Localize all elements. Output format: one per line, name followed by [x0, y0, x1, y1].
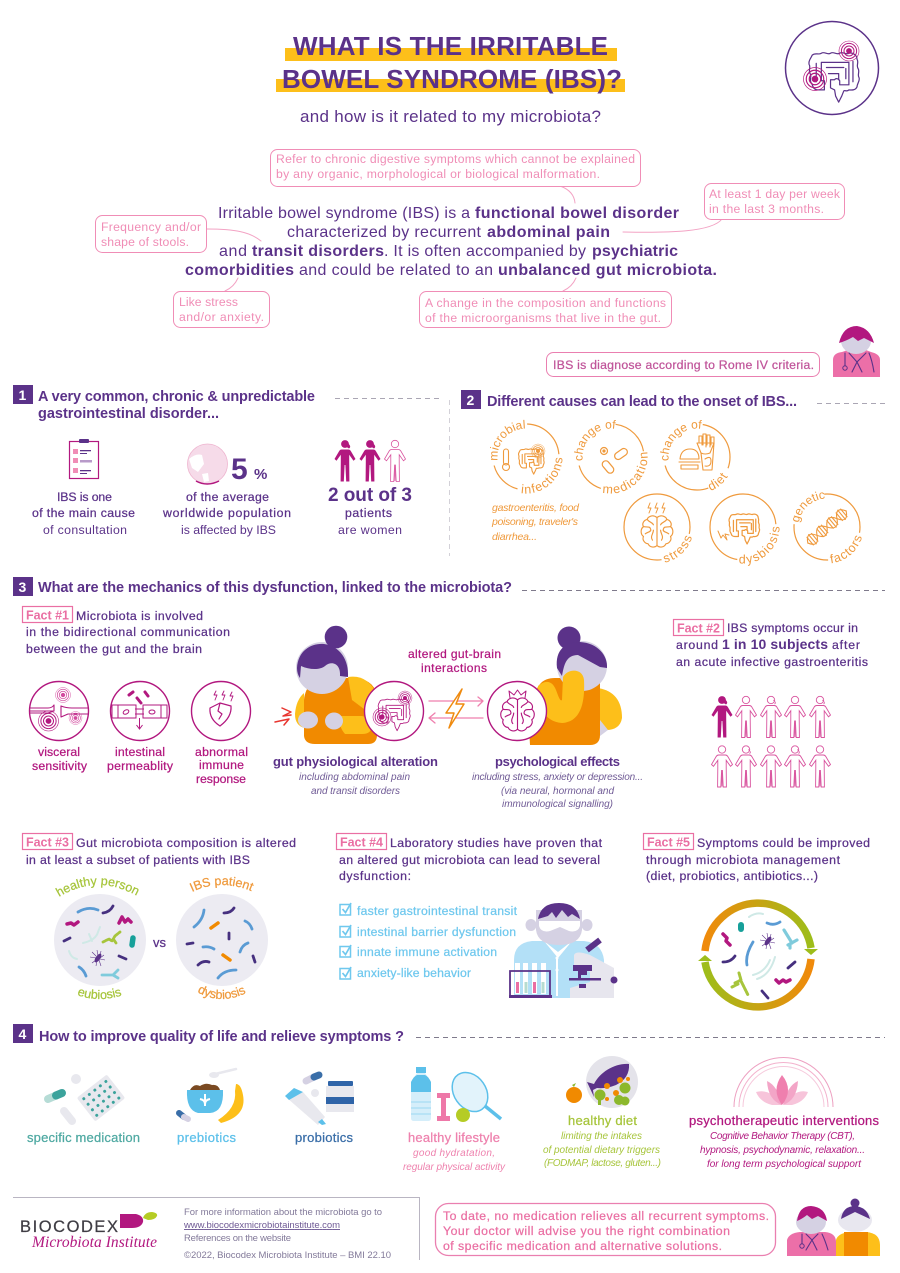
labels: fact 1 effects: visceral: [38, 745, 80, 759]
icon: globe: [188, 444, 228, 484]
label: vs: vs: [153, 935, 166, 950]
definition paragraph: [185, 205, 717, 279]
fact 2 text: IBS symptoms occur in: [727, 621, 858, 635]
test tubes: [509, 963, 552, 998]
text: of the average worldwide population: [162, 490, 291, 537]
treatment: prebiotics: [177, 1069, 244, 1145]
callout: transit disorders: Frequency and/or: [101, 220, 201, 234]
fact 3 text: Fact #3: [26, 836, 69, 850]
checklist: dysfunctions: innate immune activation: [357, 945, 497, 959]
callout: functional disorder definition: Refer to chronic digestive symptoms which cannot be explained: [276, 152, 635, 166]
cause: change of medication: [574, 420, 648, 494]
label: healthy lifestyle: [403, 1130, 506, 1173]
label: specific medication: specific medication: [27, 1130, 140, 1145]
treatment: specific medication: [27, 1074, 140, 1145]
label: psychotherapeutic interventions: hypnosis, psychodynamic, relaxation...: [700, 1145, 865, 1156]
diagram: eubiosis dish: [54, 877, 146, 1000]
label: gut physiological alteration: including abdominal pain: [299, 772, 410, 783]
cause: genetic factors: [793, 492, 862, 564]
section 2: [461, 390, 885, 566]
text: microbial infection examples: [491, 502, 580, 543]
fact 1 text: in the bidirectional communication: [26, 625, 230, 639]
label: psychotherapeutic interventions: Cognitive Behavior Therapy (CBT),: [710, 1131, 855, 1142]
callout: transit disorders: [96, 216, 261, 252]
definition paragraph: psychiatric: [592, 243, 678, 260]
fact 4 text: Fact #4: [340, 836, 383, 850]
gut-brain interactions: interactions: [421, 661, 487, 675]
icon: abnormal immune response: [192, 682, 250, 740]
definition paragraph: transit disorders: [252, 243, 384, 260]
footer: [13, 1198, 420, 1261]
illustration: scientist with microscope: [509, 903, 618, 998]
cause: change of diet: diet: [708, 472, 728, 490]
gut-brain interactions: [408, 647, 501, 728]
treatment: healthy lifestyle: [403, 1066, 506, 1173]
cause: stress: stress: [664, 536, 692, 562]
callout: comorbidities: Like stress: [179, 295, 238, 309]
icon: visceral sensitivity: [30, 682, 88, 740]
label: gut physiological alteration: [273, 754, 438, 797]
section 1 heading: gastrointestinal disorder...: [38, 406, 219, 422]
cause: change of medication: medication: [603, 452, 648, 494]
illustration: gut physiological alteration: [273, 626, 438, 797]
closing callout: Your doctor will advise you the right combination: [443, 1224, 730, 1238]
cause: change of medication: change of: [574, 420, 616, 460]
callout: frequency of pain: in the last 3 months.: [709, 202, 824, 216]
treatment: psychotherapeutic interventions: [689, 1058, 880, 1170]
fact 4 text: dysfunction:: [339, 869, 411, 883]
text: of the average worldwide population: of the average: [186, 490, 269, 504]
icon: tube, capsule and jar: [285, 1075, 354, 1125]
icon: intestinal permeability: [110, 682, 170, 740]
checklist: dysfunctions: [340, 903, 518, 980]
icon: doctor: [833, 326, 880, 377]
cause: genetic factors: genetic: [793, 492, 825, 522]
checklist: dysfunctions: intestinal barrier dysfunction: [357, 925, 516, 939]
callout: functional disorder definition: [270, 150, 640, 203]
section 2 heading: [461, 390, 885, 410]
label: psychotherapeutic interventions: for long term psychological support: [707, 1159, 862, 1170]
arrows: bidirectional: [429, 697, 483, 723]
label: psychotherapeutic interventions: psychotherapeutic interventions: [689, 1113, 880, 1128]
label: healthy diet: healthy diet: [568, 1113, 637, 1128]
footer information: For more information about the microbiota go to: [184, 1207, 382, 1218]
text: microbial infection examples: diarrhea...: [492, 531, 537, 543]
text: of the average worldwide population: is affected by IBS: [181, 523, 276, 537]
section 3 heading: 3: [18, 579, 26, 595]
label: prebiotics: prebiotics: [177, 1130, 236, 1145]
definition paragraph: and could be related to an: [299, 262, 493, 279]
footer information: References on the website: [184, 1233, 291, 1244]
stat: 2 out of 3: 2 out of 3: [328, 485, 412, 506]
section 1 heading: 1: [18, 387, 26, 403]
cause: microbial infections: infections: [522, 458, 562, 494]
stat: 2 out of 3: [328, 485, 412, 537]
section 2 heading: 2: [466, 392, 474, 408]
fact 5 text: Symptoms could be improved: [697, 836, 870, 850]
label: gut physiological alteration: gut physiological alteration: [273, 754, 438, 769]
treatment: healthy diet: [543, 1056, 661, 1169]
fact 1 text: Fact #1: [26, 608, 69, 622]
label: psychological effects: psychological effects: [495, 754, 620, 769]
fact 2 text: Fact #2: [677, 622, 720, 636]
callout: transit disorders: shape of stools.: [101, 235, 189, 249]
text: main cause of consultation: of the main cause: [32, 506, 135, 520]
text: main cause of consultation: of consultation: [43, 523, 127, 537]
label: healthy lifestyle: regular physical activity: [403, 1162, 506, 1173]
fact 4: [336, 834, 618, 998]
definition paragraph: Irritable bowel syndrome (IBS) is a: [218, 205, 470, 222]
icon: bottle, dumbbell, racket: [411, 1066, 501, 1122]
woman figure hand on head: [529, 626, 622, 745]
fact 2 text: [674, 620, 868, 669]
definition paragraph: characterized by recurrent: [287, 224, 482, 241]
labels: fact 1 effects: response: [196, 772, 246, 786]
label: probiotics: probiotics: [295, 1130, 354, 1145]
diagram: microbiota cycle: [698, 903, 818, 1007]
callout: frequency of pain: [623, 184, 844, 232]
text: of the average worldwide population: worldwide population: [162, 506, 291, 520]
label: healthy diet: (FODMAP, lactose, gluten...): [544, 1158, 661, 1169]
microscope: [569, 940, 618, 998]
diagnosis note: [546, 352, 820, 376]
title: [276, 31, 625, 94]
footer information: [183, 1207, 391, 1261]
text: microbial infection examples: gastroenteritis, food: [492, 502, 580, 514]
footer information: www.biocodexmicrobiotainstitute.com: [183, 1220, 340, 1231]
label: psychotherapeutic interventions: [689, 1113, 880, 1170]
labels: fact 1 effects: abnormal: [195, 745, 248, 759]
diagram: dysbiosis dish: dysbiosis: [198, 986, 246, 1000]
stat: 5 percent: 5: [231, 453, 248, 486]
fact 2 text: after: [832, 638, 860, 652]
checklist: dysfunctions: faster gastrointestinal transit: [357, 904, 518, 918]
callout: comorbidities: [174, 278, 270, 328]
fact 4 text: Laboratory studies have proven that: [390, 836, 603, 850]
title text: WHAT IS THE IRRITABLE: [293, 31, 608, 61]
section 4 heading: How to improve quality of life and relieve symptoms ?: [39, 1029, 404, 1045]
treatment: probiotics: [285, 1075, 354, 1145]
label: healthy diet: of potential dietary triggers: [543, 1145, 660, 1156]
diagram: dysbiosis dish: IBS patient: [190, 876, 254, 892]
title highlight bars: [276, 48, 625, 92]
labels: fact 1 effects: immune: [199, 758, 244, 772]
cause: stress: [623, 493, 692, 562]
text: main cause of consultation: [32, 490, 135, 537]
cause: genetic factors: factors: [830, 536, 862, 564]
fact 3 text: [22, 834, 296, 867]
fact 2 text: around: [676, 638, 718, 652]
fact 2 text: 1 in 10 subjects: [722, 636, 828, 652]
label: gut physiological alteration: and transit disorders: [311, 786, 400, 797]
fact 1: [22, 606, 250, 786]
stat: 2 out of 3: patients: [345, 506, 392, 520]
fact 5 text: (diet, probiotics, antibiotics...): [646, 869, 818, 883]
section 2 heading: Different causes can lead to the onset of IBS...: [487, 394, 797, 410]
illustration: psychological effects: [472, 626, 643, 810]
fact 5 text: [644, 834, 870, 883]
labels: fact 1 effects: intestinal: [115, 745, 165, 759]
labels: fact 1 effects: [32, 745, 248, 786]
callout: unbalanced microbiota: [420, 278, 672, 328]
stat: 5 percent: [231, 453, 267, 486]
fact 3 text: Gut microbiota composition is altered: [76, 836, 296, 850]
fact 5 text: through microbiota management: [646, 853, 841, 867]
cause: change of diet: change of: [660, 420, 702, 460]
fact 3: [22, 832, 296, 1000]
closing callout: of specific medication and alternative solutions.: [443, 1239, 722, 1253]
icon: doctor and patient: [787, 1198, 880, 1256]
definition paragraph: abdominal pain: [487, 224, 610, 241]
patient: [836, 1198, 880, 1256]
label: healthy lifestyle: healthy lifestyle: [408, 1130, 500, 1145]
icon: lightning: [446, 689, 464, 728]
fact 4 text: [336, 834, 603, 883]
section 1: [13, 385, 440, 537]
diagram: eubiosis dish: eubiosis: [78, 988, 122, 1000]
callout: unbalanced microbiota: A change in the composition and functions: [425, 296, 666, 310]
label: healthy lifestyle: good hydratation,: [413, 1148, 495, 1159]
definition paragraph: and: [219, 243, 247, 260]
fact 1 text: Microbiota is involved: [76, 609, 203, 623]
section 1 heading: [13, 385, 440, 422]
doctor: [787, 1206, 836, 1256]
cause: dysbiosis: dysbiosis: [739, 526, 780, 566]
fact 1 text: [22, 606, 230, 656]
cause: change of diet: [660, 420, 731, 491]
label: healthy diet: limiting the intakes: [561, 1131, 642, 1142]
icon: brain in circle: [488, 682, 546, 740]
fact 4 text: an altered gut microbiota can lead to several: [339, 853, 600, 867]
label: psychological effects: including stress, anxiety or depression...: [472, 772, 643, 783]
logo: Biocodex Microbiota Institute: Microbiota Institute: [31, 1234, 157, 1251]
definition paragraph: unbalanced gut microbiota.: [498, 262, 717, 279]
section 1 heading: A very common, chronic & unpredictable: [38, 389, 315, 405]
fact 3 text: in at least a subset of patients with IBS: [26, 853, 250, 867]
checklist: dysfunctions: anxiety-like behavior: [357, 966, 471, 980]
closing callout: [436, 1204, 776, 1256]
footer information: ©2022, Biocodex Microbiota Institute – BMI 22.10: [184, 1250, 391, 1261]
text: main cause of consultation: IBS is one: [57, 490, 112, 504]
diagram: dysbiosis dish: [176, 876, 268, 1000]
label: healthy diet: [543, 1113, 661, 1169]
text: microbial infection examples: poisoning, traveler's: [491, 516, 579, 528]
title text: [282, 31, 622, 94]
icon: clipboard: [70, 439, 98, 478]
stat: 2 out of 3: are women: [338, 523, 402, 537]
callout: functional disorder definition: by any organic, morphological or biological malformation.: [276, 167, 600, 181]
diagram: eubiosis dish: healthy person: [55, 877, 139, 897]
scientist: [514, 903, 604, 998]
labels: fact 1 effects: sensitivity: [32, 759, 88, 773]
icon: fish plate and orange: [566, 1056, 638, 1108]
section 4 heading: [13, 1024, 885, 1045]
definition paragraph: comorbidities: [185, 262, 294, 279]
icon: gut in circle: [364, 682, 424, 740]
section 3 heading: What are the mechanics of this dysfunction, linked to the microbiota?: [38, 580, 512, 596]
icon: lotus under arcs: [734, 1058, 833, 1107]
logo: Biocodex Microbiota Institute: [20, 1212, 157, 1251]
stat: 5 percent: %: [254, 466, 267, 483]
diagnosis note: IBS is diagnose according to Rome IV criteria.: [553, 358, 814, 372]
icon: pills and blister: [48, 1074, 125, 1122]
fact 5: [644, 834, 870, 1007]
definition paragraph: . It is often accompanied by: [384, 243, 586, 260]
title text: BOWEL SYNDROME (IBS)?: [282, 64, 622, 94]
fact 1 text: between the gut and the brain: [26, 642, 202, 656]
callout: frequency of pain: At least 1 day per week: [709, 187, 841, 201]
section 4 heading: 4: [18, 1026, 26, 1042]
logo: Biocodex Microbiota Institute: BIOCODEX: [20, 1218, 118, 1236]
callout: unbalanced microbiota: of the microorganisms that live in the gut.: [425, 311, 661, 325]
cause: microbial infections: [490, 420, 562, 494]
gut-brain interactions: altered gut-brain: [408, 647, 501, 661]
closing callout: To date, no medication relieves all recurrent symptoms.: [443, 1209, 769, 1223]
callout: comorbidities: and/or anxiety.: [179, 310, 264, 324]
fact 5 text: Fact #5: [647, 836, 690, 850]
icon: intestine in circle: [786, 22, 878, 114]
cause: dysbiosis: [709, 493, 780, 566]
woman figure holding belly: [275, 626, 377, 744]
labels: fact 1 effects: permeablity: [107, 759, 174, 773]
definition paragraph: functional bowel disorder: [475, 205, 679, 222]
section 3 heading: [13, 577, 885, 596]
label: psychological effects: [472, 754, 643, 810]
icon: bowl and banana: [179, 1069, 244, 1123]
fact 2: [674, 620, 868, 787]
label: psychological effects: (via neural, hormonal and: [501, 786, 614, 797]
fact 2 text: an acute infective gastroenteritis: [676, 655, 868, 669]
icon: people 2 of 3: [334, 440, 406, 482]
subtitle: and how is it related to my microbiota?: [300, 107, 601, 126]
label: psychological effects: immunological signalling): [502, 799, 613, 810]
icon: 1 in 10 people: [712, 696, 830, 787]
cause: microbial infections: microbial: [490, 420, 525, 460]
